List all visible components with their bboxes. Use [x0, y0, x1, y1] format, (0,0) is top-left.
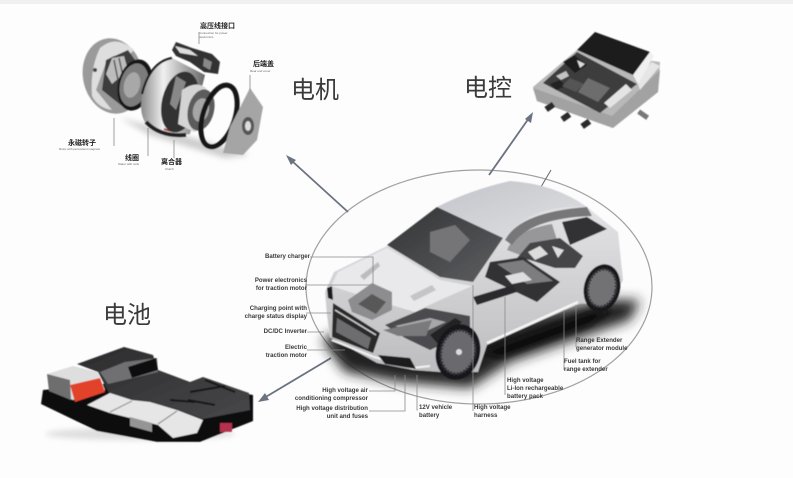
- label: power electronics: for traction motor: [256, 285, 308, 292]
- icon: battery pack: [41, 347, 253, 442]
- motor end plate: [223, 88, 263, 155]
- label: air conditioning compressor: High voltage air: [322, 387, 368, 394]
- motor connector: [172, 42, 220, 74]
- label: fuel tank: range extender: [564, 366, 608, 373]
- label: power electronics: Power electronics: [255, 277, 307, 284]
- car headlights: [327, 286, 333, 300]
- battery black base: [41, 378, 253, 442]
- battery red cells: [70, 378, 105, 402]
- front wheel: [430, 320, 486, 384]
- label: DC/DC inverter: DC/DC Inverter: [264, 328, 308, 335]
- car engine bay: [348, 283, 470, 350]
- car lower intake: [378, 355, 416, 369]
- arrow: to controller: [489, 112, 533, 175]
- label: fuel tank: Fuel tank for: [564, 358, 601, 365]
- label: 12V battery: battery: [419, 412, 440, 419]
- arrow: to battery: [258, 358, 331, 402]
- motor part labels: Clutch: [165, 167, 174, 171]
- label: charging point: Charging point with: [250, 305, 307, 312]
- motor part labels: [59, 21, 274, 171]
- label: battery pack: High voltage: [507, 377, 544, 384]
- motor part labels: 离合器: [161, 157, 182, 167]
- label: battery pack: battery pack: [507, 393, 544, 400]
- top strip: [0, 0, 793, 4]
- label: harness: High voltage: [474, 404, 511, 411]
- motor black ring: [194, 81, 244, 151]
- battery white flat cells: [87, 393, 203, 438]
- label: 12V battery: 12V vehicle: [419, 404, 452, 411]
- car side windows: [507, 224, 558, 255]
- label: range extender: Range Extender: [576, 337, 622, 344]
- battery white module: [47, 366, 105, 400]
- motor part labels: 线圈: [125, 153, 139, 163]
- label: distribution unit: High voltage distribution: [296, 405, 368, 412]
- motor part labels: 高压线接口: [200, 21, 235, 31]
- controller housing: [533, 50, 660, 128]
- car roof: [437, 181, 587, 238]
- leader lines: [305, 257, 576, 411]
- label: battery charger: Battery charger: [265, 253, 311, 260]
- controller black block: [577, 32, 650, 75]
- car grille: [332, 303, 380, 353]
- title: battery: 电池: [103, 302, 151, 329]
- battery dark cover: [77, 347, 250, 419]
- controller connectors: [544, 102, 649, 129]
- icon: controller module: [533, 32, 660, 129]
- label: air conditioning compressor: conditioning compressor: [295, 395, 369, 402]
- motor stator: [141, 58, 205, 136]
- motor part labels: Stator with coils: [118, 162, 140, 166]
- car shadow: [322, 300, 640, 388]
- car rocker sill: [487, 302, 578, 343]
- label: battery pack: Li-Ion rechargeable: [507, 385, 564, 392]
- motor part labels: electronics: [199, 35, 214, 39]
- label: harness: harness: [474, 412, 498, 419]
- rear motor components: [517, 238, 583, 268]
- label: charging point: charge status display: [245, 313, 308, 320]
- icon: exploded motor: [76, 33, 263, 158]
- label: electric motor: Electric: [285, 344, 307, 351]
- pointer: roof line: [538, 170, 551, 192]
- car hood: [331, 248, 472, 312]
- label: range extender: generator module: [576, 345, 628, 352]
- motor part labels: 后端盖: [253, 59, 274, 69]
- battery pink connector: [220, 423, 232, 432]
- diagram ellipse: [306, 170, 652, 404]
- battery pack in car: [473, 257, 560, 305]
- title: controller: 电控: [464, 75, 512, 102]
- illustration: electric car: [322, 181, 640, 388]
- controller circuit board: [543, 52, 637, 113]
- car front bumper: [332, 340, 430, 368]
- rear wheel: [579, 260, 625, 316]
- title: motor: 电机: [291, 77, 339, 104]
- motor part labels: Rotor with permanent magnets: [59, 147, 101, 151]
- car callout labels: [245, 253, 628, 420]
- arrow: to motor: [286, 155, 348, 212]
- motor housing left: [76, 33, 158, 119]
- motor part labels: 永磁转子: [68, 138, 96, 148]
- motor rotor: [178, 84, 219, 134]
- label: electric motor: traction motor: [266, 352, 308, 359]
- motor part labels: Connection for power: [199, 31, 228, 35]
- label: distribution unit: unit and fuses: [327, 413, 369, 420]
- motor part labels: Rear end cover: [250, 69, 271, 73]
- car windshield: [387, 207, 503, 282]
- car body: [325, 181, 623, 372]
